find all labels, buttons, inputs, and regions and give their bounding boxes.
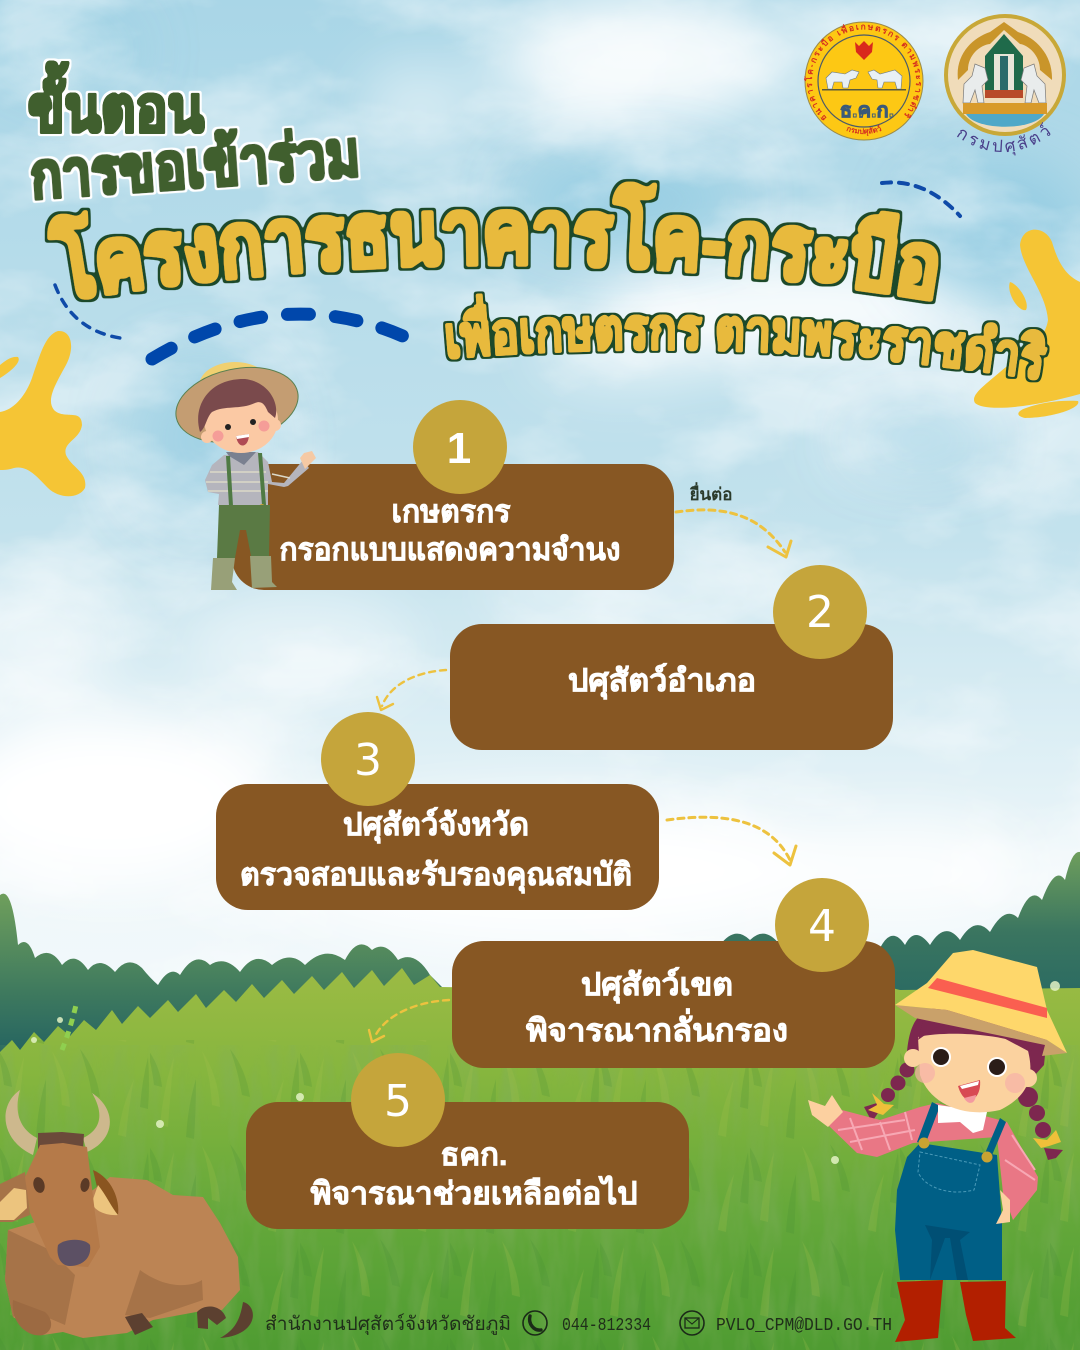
step 1 text: เกษตรกร (392, 494, 511, 529)
dashed curve: thin blue right (882, 182, 960, 216)
step 5 card (246, 1053, 689, 1229)
step 5 text: พิจารณาช่วยเหลือต่อไป (310, 1175, 638, 1211)
illustration: farmer girl (808, 950, 1067, 1342)
step 1 text: กรอกแบบแสดงความจำนง (280, 532, 620, 567)
footer: office name: สำนักงานปศุสัตว์จังหวัดชัยภูมิ (265, 1313, 511, 1336)
step 3 card (216, 712, 659, 910)
step 1 number (413, 400, 507, 494)
title: การขอเข้าร่วม: การขอเข้าร่วม (28, 117, 362, 212)
arrow: step 2 to 3 (377, 670, 446, 710)
step 4 number (775, 878, 869, 972)
step 3 text: ตรวจสอบและรับรองคุณสมบัติ (240, 857, 632, 894)
step 4 text (526, 967, 788, 1048)
illustration: farmer boy (169, 357, 316, 590)
logo: ธ.ค.ก. bank seal: กรมปศุสัตว์ (846, 124, 882, 136)
dashed curve: thin blue left (55, 285, 120, 338)
step 4 card (452, 878, 895, 1068)
logo: กรมปศุสัตว์ seal (944, 14, 1066, 156)
step 1 card (232, 400, 674, 590)
step 2 card (450, 565, 893, 750)
footer: phone number: 044-812334 (562, 1316, 651, 1336)
step 5 numeral: 5 (384, 1076, 412, 1127)
step 3 text: ปศุสัตว์จังหวัด (343, 807, 529, 844)
step 5 number (351, 1053, 445, 1147)
footer: email: PVLO_CPM@DLD.GO.TH (716, 1316, 892, 1336)
dashed curve: thick blue (152, 314, 405, 359)
background: grass field (0, 968, 1080, 1350)
decorative: left yellow splash (0, 331, 85, 496)
step 2 text: ปศุสัตว์อำเภอ (568, 663, 756, 700)
arrow: step 1 to 2 (676, 482, 791, 557)
step 4 numeral: 4 (808, 901, 836, 952)
logo: ธ.ค.ก. bank seal: ธ.ค.ก. (840, 100, 894, 122)
icon: envelope (680, 1311, 704, 1335)
step 3 text (240, 807, 632, 894)
title: ขั้นตอน: ขั้นตอน (28, 62, 204, 145)
logo: ธ.ค.ก. bank seal: ธนาคารโค-กระบือ เพื่อเกษตรกร ตามพระราชดำริ (804, 24, 921, 120)
title: โครงการธนาคารโค-กระบือ: โครงการธนาคารโค-กระบือ (44, 178, 941, 304)
subtitle: เพื่อเกษตรกร ตามพระราชดำริ: เพื่อเกษตรกร ตามพระราชดำริ (443, 291, 1050, 382)
step 1 text (280, 494, 620, 567)
background: tree line (0, 852, 1080, 1110)
step 4 text: ปศุสัตว์เขต (581, 967, 733, 1004)
decorative: right yellow splash (974, 230, 1080, 418)
arrow: step 4 to 5 (369, 1000, 449, 1042)
arrow: step 3 to 4 (667, 817, 796, 865)
step 2 numeral: 2 (806, 587, 834, 638)
illustration: cow (0, 1090, 253, 1338)
label: ยื่นต่อ: ยื่นต่อ (690, 482, 732, 504)
logo: กรมปศุสัตว์ seal: กรมปศุสัตว์ (957, 122, 1050, 156)
icon: phone (523, 1311, 547, 1335)
step 4 text: พิจารณากลั่นกรอง (526, 1008, 788, 1048)
step 2 number (773, 565, 867, 659)
footer contact line (265, 1311, 892, 1336)
step 3 numeral: 3 (354, 735, 382, 786)
step 5 text: ธคก. (440, 1137, 508, 1172)
step 5 text (310, 1137, 638, 1211)
step 3 number (321, 712, 415, 806)
step 1 numeral: 1 (447, 424, 471, 473)
